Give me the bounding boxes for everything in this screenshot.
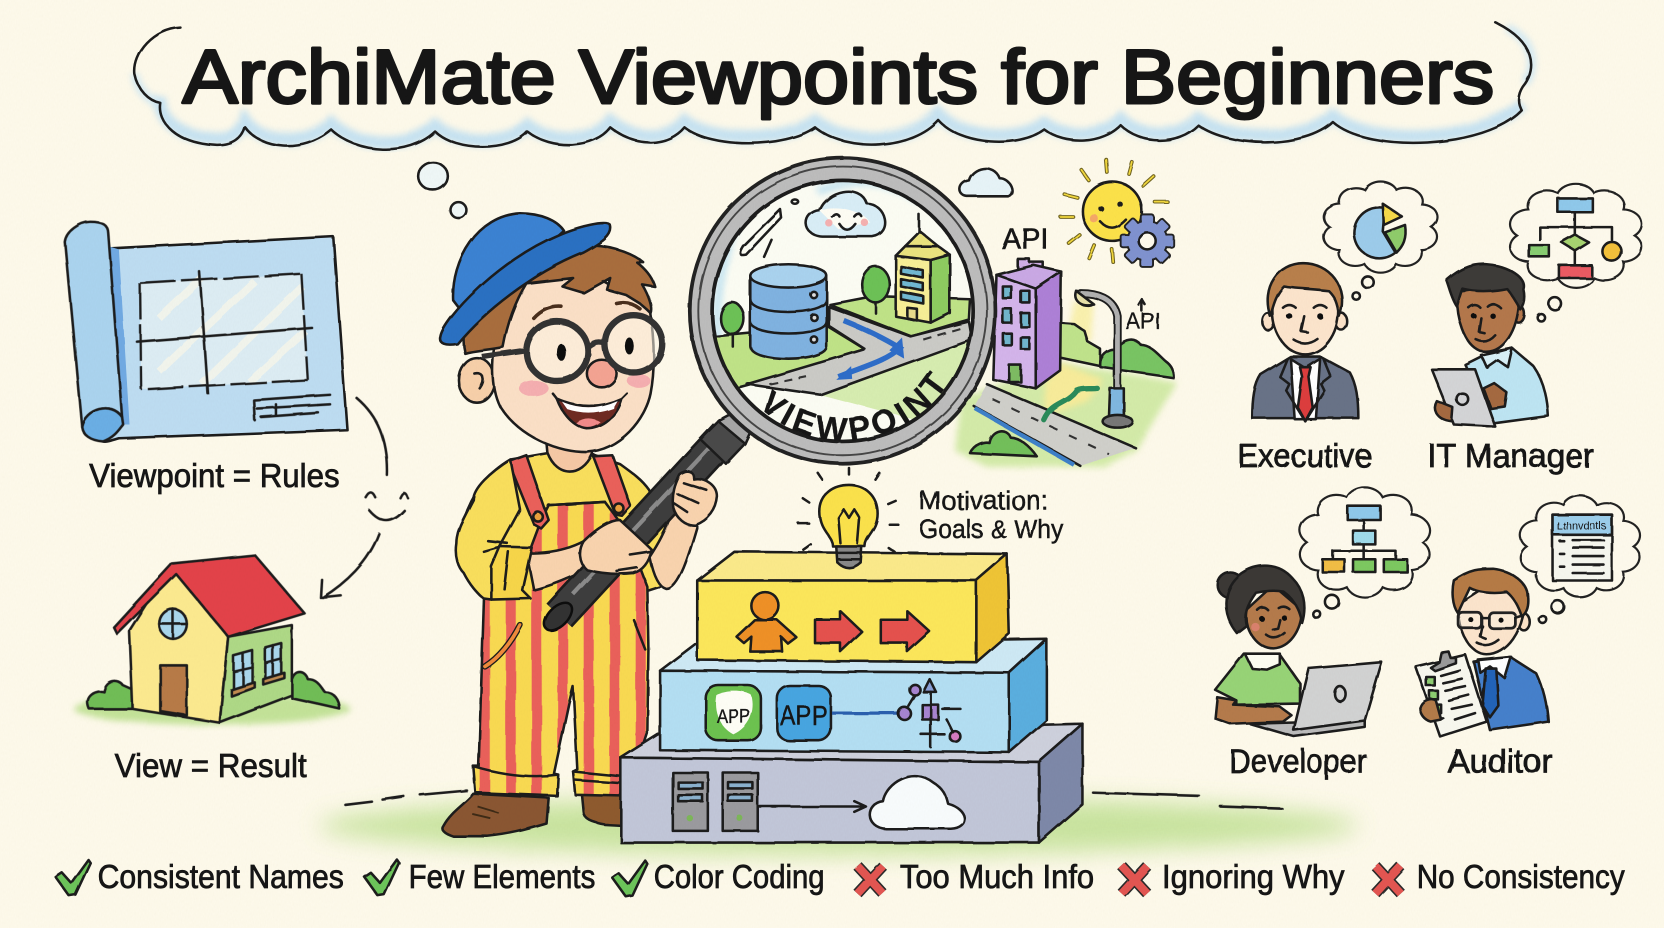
icon: smiling cloud xyxy=(806,191,885,237)
hat xyxy=(440,213,611,345)
character xyxy=(442,444,697,836)
title: ArchiMate Viewpoints for Beginners xyxy=(183,35,1494,120)
tip: color coding: Color Coding xyxy=(654,858,825,895)
thought: document xyxy=(1520,496,1640,623)
check 1 xyxy=(55,860,90,896)
tablet xyxy=(1432,369,1495,427)
glasses xyxy=(482,315,662,381)
head xyxy=(1513,306,1524,323)
motivation label: Goals & Why xyxy=(919,516,1064,544)
arm and hand right xyxy=(649,507,697,589)
lens label: VIEWPOINT xyxy=(764,370,944,440)
viewpoint label: Viewpoint = Rules xyxy=(89,457,340,494)
icon: app blue: APP xyxy=(780,700,828,731)
arrow to cloud xyxy=(760,801,866,812)
icon: orange person xyxy=(736,592,796,652)
icon: good checks and bad crosses row xyxy=(55,860,1401,897)
thought: flowchart xyxy=(1510,184,1642,321)
thought bubbles above character xyxy=(418,162,466,218)
tip: too much info: Too Much Info xyxy=(900,858,1094,895)
view label: View = Result xyxy=(115,747,307,784)
persona: executive xyxy=(1252,182,1438,421)
icon: purple building xyxy=(993,259,1061,388)
icon: trees xyxy=(721,266,889,347)
thought: hierarchy xyxy=(1300,487,1430,618)
persona: auditor xyxy=(1416,496,1640,736)
icon: lens reflection xyxy=(740,200,798,257)
head xyxy=(1262,313,1274,330)
motivation label: Motivation: xyxy=(919,487,1048,515)
tip: no consistency: No Consistency xyxy=(1417,858,1625,895)
application layer xyxy=(660,639,1046,752)
character head xyxy=(440,213,662,452)
cross 1 xyxy=(857,866,883,894)
arrow and smile between rules and result xyxy=(321,398,408,597)
striped overalls xyxy=(473,455,648,796)
head xyxy=(1217,572,1243,597)
tip: consistent names: Consistent Names xyxy=(98,858,344,895)
magnifying glass handle xyxy=(539,414,751,635)
suit xyxy=(1252,357,1358,418)
cross 2 xyxy=(1122,866,1147,894)
hands over handle xyxy=(580,471,717,574)
icon: light bulb xyxy=(798,468,898,568)
motivation label xyxy=(919,487,1064,544)
shoes xyxy=(442,791,626,836)
persona: it manager xyxy=(1432,184,1642,427)
clipboard xyxy=(1416,655,1487,736)
check 3 xyxy=(612,861,647,897)
icon: office building xyxy=(896,214,950,323)
tip: ignoring why: Ignoring Why xyxy=(1162,858,1345,895)
icon: app green xyxy=(706,686,761,741)
it manager label: IT Manager xyxy=(1427,437,1594,474)
icon: servers xyxy=(673,773,758,831)
icon: gear xyxy=(1121,214,1174,267)
icon: street lamp xyxy=(1075,291,1132,428)
icon: cloud xyxy=(870,776,964,829)
title cloud banner xyxy=(135,22,1532,149)
body xyxy=(1215,654,1300,705)
icon: blueprint scroll xyxy=(65,222,347,442)
shirt xyxy=(1466,348,1548,423)
technology layer xyxy=(621,724,1082,843)
api label by lamp: API xyxy=(1126,308,1161,334)
cross 3 xyxy=(1375,866,1401,894)
suit xyxy=(1474,657,1548,730)
neck xyxy=(547,444,593,475)
laptop xyxy=(1250,721,1365,736)
architecture layer stack xyxy=(621,552,1082,843)
check 2 xyxy=(364,860,399,896)
tip: few elements: Few Elements xyxy=(409,858,595,895)
icon: house xyxy=(74,555,350,725)
icon: database cylinder xyxy=(750,264,827,359)
service network xyxy=(832,679,960,747)
shirt xyxy=(464,453,679,594)
persona: developer xyxy=(1215,487,1430,736)
cheeks and nose xyxy=(519,380,549,396)
red arrows xyxy=(815,611,930,652)
magnifying glass lens xyxy=(688,156,998,466)
icon: sun xyxy=(1060,159,1167,262)
auditor label: Auditor xyxy=(1447,743,1553,780)
icon: app green: APP xyxy=(716,707,750,728)
hair xyxy=(463,245,655,353)
icon: small cloud xyxy=(960,168,1012,196)
api label on building: API xyxy=(1002,223,1048,255)
thought: pie chart xyxy=(1324,182,1438,300)
mouth xyxy=(553,394,627,429)
icon: app blue xyxy=(777,686,831,741)
developer label: Developer xyxy=(1229,743,1367,780)
ground xyxy=(318,791,1358,854)
head xyxy=(1518,613,1530,630)
scene outside the lens xyxy=(955,159,1177,467)
glasses xyxy=(1458,612,1523,628)
executive label: Executive xyxy=(1237,437,1372,474)
arm and hand left xyxy=(456,459,652,600)
business layer xyxy=(697,552,1009,662)
thought: document: Lthnvdntls xyxy=(1557,521,1607,533)
